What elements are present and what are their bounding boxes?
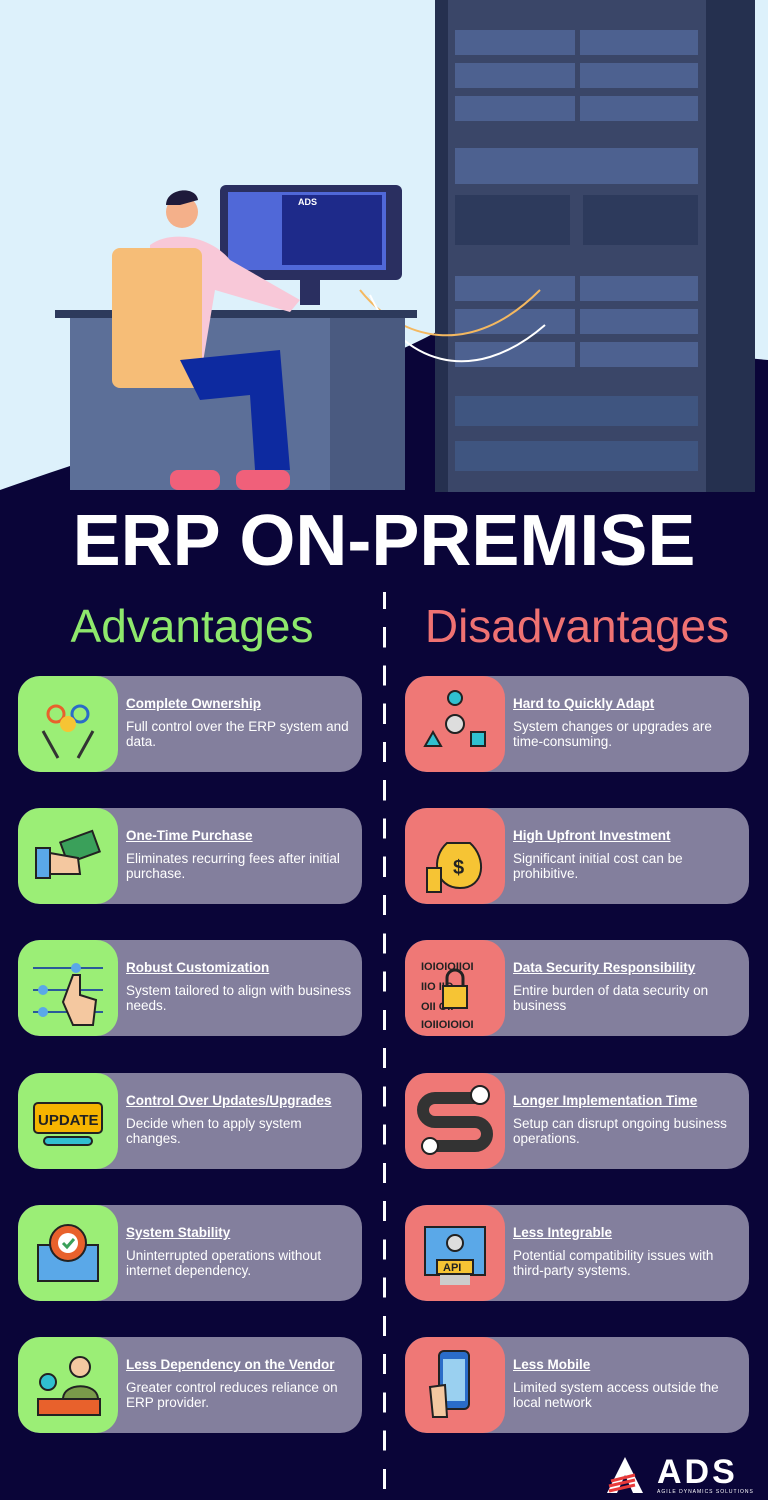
title: ERP ON-PREMISE: [73, 501, 695, 581]
hero illustration: [0, 0, 768, 492]
card: control over updates: Decide when to apply system changes.: [126, 1116, 302, 1146]
card: control over updates: UPDATE: [38, 1112, 99, 1129]
card: one-time purchase: [18, 808, 362, 904]
card: less mobile: Limited system access outside the local network: [513, 1380, 719, 1410]
card: less integrable: API: [443, 1262, 461, 1274]
card: data security: IOIOIOIIOI: [421, 961, 474, 973]
card: hard to adapt: [405, 676, 749, 772]
logo: ADS: [607, 1453, 754, 1495]
card: robust customization: Robust Customization: [126, 960, 269, 975]
card: control over updates: [18, 1073, 362, 1169]
heading: disadvantages: Disadvantages: [425, 600, 729, 652]
card: less mobile: Less Mobile: [513, 1357, 590, 1372]
card: less mobile: [405, 1337, 749, 1433]
card: data security: OII OII: [421, 1001, 453, 1013]
card: less dependency: Greater control reduces reliance on ERP provider.: [126, 1380, 338, 1410]
card: longer implementation: Setup can disrupt ongoing business operations.: [513, 1116, 727, 1146]
card: system stability: Uninterrupted operations without internet dependency.: [126, 1248, 321, 1278]
card: longer implementation: [405, 1073, 749, 1169]
divider: [383, 592, 386, 1500]
card: high upfront investment: [405, 808, 749, 904]
card: robust customization: [18, 940, 362, 1036]
logo: ADS: AGILE DYNAMICS SOLUTIONS: [657, 1489, 754, 1495]
card: less dependency: Less Dependency on the Vendor: [126, 1357, 335, 1372]
card: hard to adapt: Hard to Quickly Adapt: [513, 696, 654, 711]
card: data security: IOIIOIOIOI: [421, 1019, 474, 1031]
card: high upfront investment: $: [453, 857, 464, 879]
card: data security: Entire burden of data security on business: [513, 983, 708, 1013]
card: complete ownership: Complete Ownership: [126, 696, 261, 711]
card: complete ownership: [18, 676, 362, 772]
card: longer implementation: Longer Implementation Time: [513, 1093, 697, 1108]
card: complete ownership: Full control over the ERP system and data.: [126, 719, 349, 749]
logo: ADS: ADS: [657, 1453, 738, 1491]
card: high upfront investment: High Upfront Investment: [513, 828, 670, 843]
card: robust customization: System tailored to align with business needs.: [126, 983, 351, 1013]
card: data security: IIO IIO: [421, 981, 454, 993]
card: high upfront investment: Significant initial cost can be prohibitive.: [513, 851, 683, 881]
card: control over updates: Control Over Updates/Upgrades: [126, 1093, 332, 1108]
card: hard to adapt: System changes or upgrades are time-consuming.: [513, 719, 712, 749]
card: data security: [405, 940, 749, 1036]
desk and person: ADS: [298, 197, 317, 207]
card: less dependency: [18, 1337, 362, 1433]
server rack: [360, 0, 755, 492]
card: less integrable: Less Integrable: [513, 1225, 612, 1240]
card: system stability: [18, 1205, 362, 1301]
heading: advantages: Advantages: [71, 600, 313, 652]
card: one-time purchase: Eliminates recurring fees after initial purchase.: [126, 851, 340, 881]
card: less integrable: Potential compatibility issues with third-party systems.: [513, 1248, 713, 1278]
card: system stability: System Stability: [126, 1225, 230, 1240]
card: less integrable: [405, 1205, 749, 1301]
desk and person: [55, 185, 417, 490]
card: data security: Data Security Responsibility: [513, 960, 695, 975]
card: one-time purchase: One-Time Purchase: [126, 828, 253, 843]
